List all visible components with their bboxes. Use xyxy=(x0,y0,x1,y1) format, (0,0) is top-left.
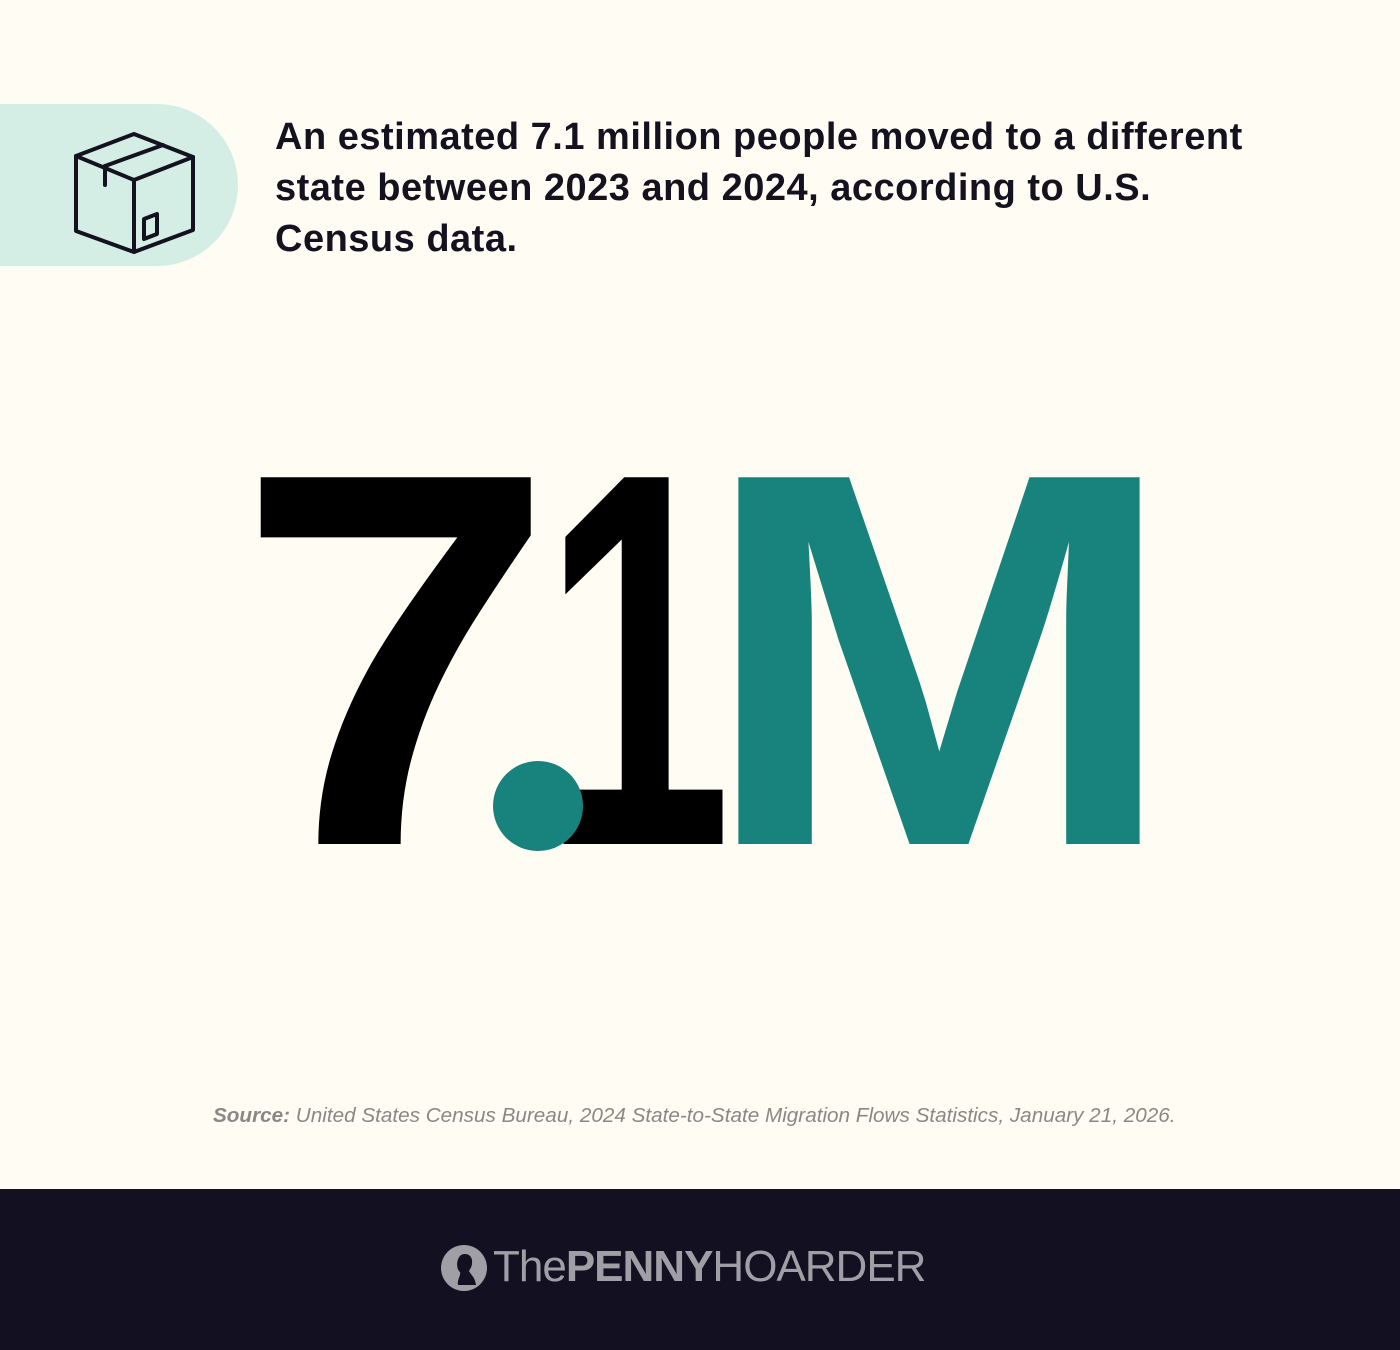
big number: 7.1M: 7 xyxy=(236,361,556,957)
big number: 7.1M xyxy=(236,361,1178,957)
headline text: An estimated 7.1 million people moved to a different state between 2023 and 2024, according to U.S. Census data. xyxy=(275,116,1243,260)
big number: 7.1M: 1 xyxy=(542,361,732,957)
logo: The Penny Hoarder: ThePENNYHOARDER xyxy=(493,1242,925,1291)
icon: cardboard box xyxy=(74,132,196,254)
big number: 7.1M: . xyxy=(490,361,586,957)
icon: penny silhouette xyxy=(441,1245,487,1291)
icon panel: teal pill with box xyxy=(0,104,238,266)
source note: Source: United States Census Bureau, 2024 State-to-State Migration Flows Statistics, January 21, 2026. xyxy=(213,1104,1175,1127)
footer bar xyxy=(0,1189,1400,1350)
big number: 7.1M: M xyxy=(700,361,1178,957)
